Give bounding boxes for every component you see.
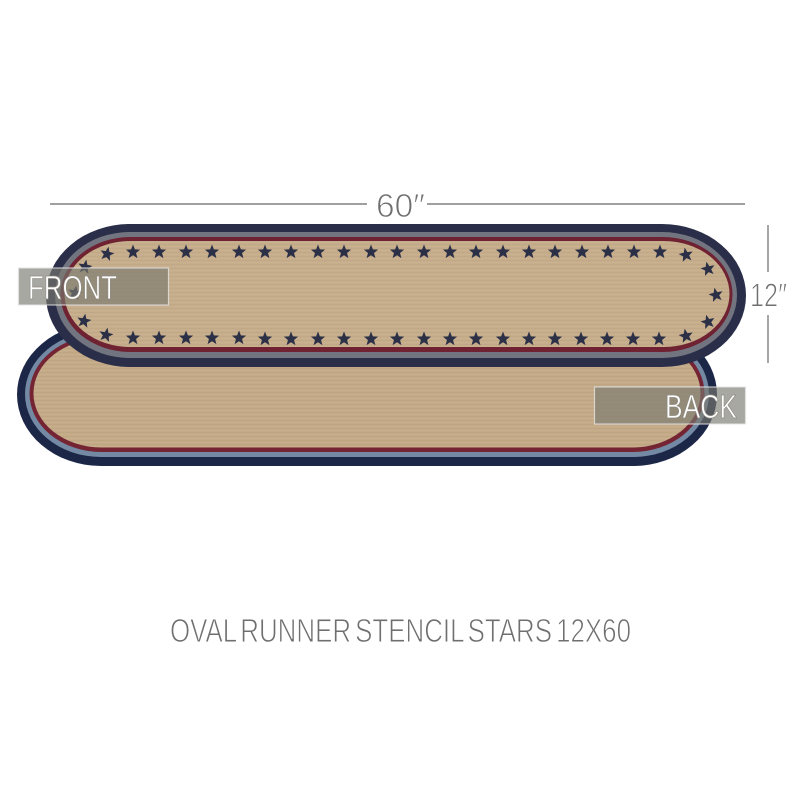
star border (67, 244, 724, 345)
title: OVAL RUNNER STENCIL STARS 12X60 (170, 612, 631, 649)
back label: BACK (665, 388, 737, 425)
width dimension 60 inches: 60″ (376, 187, 425, 224)
back rug (17, 323, 717, 466)
height dimension 12 inches: 12″ (750, 276, 787, 314)
height dimension 12 inches (750, 225, 787, 363)
front label: FRONT (28, 269, 117, 306)
front rug (46, 224, 746, 367)
back label (594, 387, 746, 425)
